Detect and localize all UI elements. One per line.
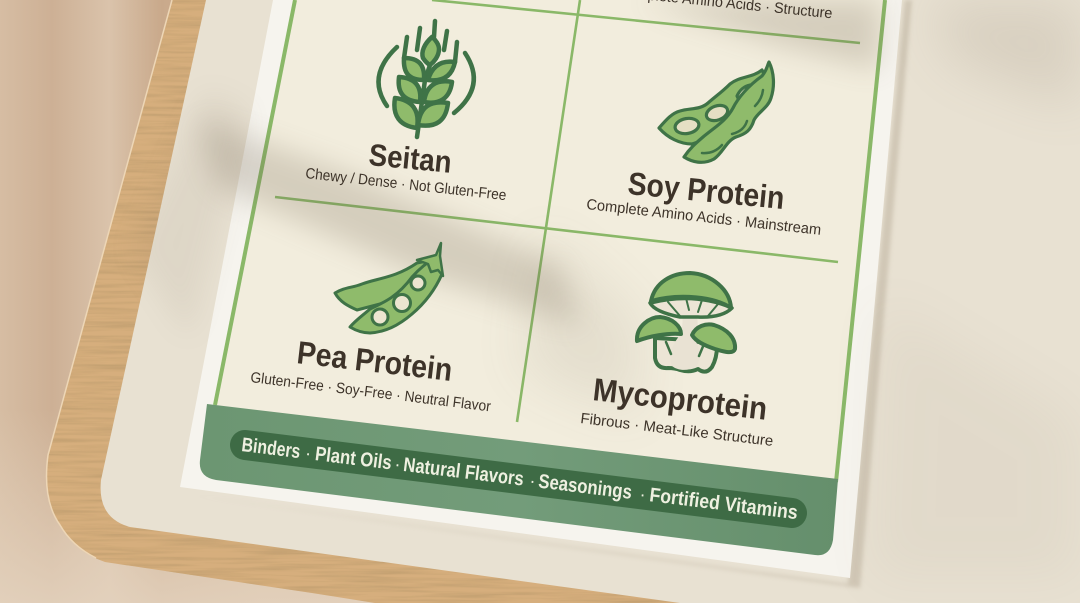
icon: wheat <box>379 21 474 137</box>
main stem <box>670 310 700 370</box>
back half <box>335 260 432 310</box>
footer pill text: · <box>528 470 537 491</box>
pod dashes <box>702 90 763 153</box>
footer pill: other ingredients <box>240 434 799 524</box>
heading: Pea Protein: Pea Protein <box>295 334 454 388</box>
right cap <box>692 324 735 352</box>
large cap dome <box>651 273 731 308</box>
footer pill text: · <box>639 484 647 505</box>
outer frame lines <box>215 0 885 482</box>
stems base outline <box>655 338 717 372</box>
calyx and stem <box>417 243 443 276</box>
white paper <box>180 0 902 578</box>
front half <box>350 260 442 333</box>
footer pill text: Seasonings <box>537 471 633 504</box>
subtitle: Soy Protein: Complete Amino Acids · Mainstream <box>586 196 822 239</box>
footer pill text: Plant Oils <box>314 443 393 474</box>
front pod <box>684 62 773 162</box>
wheat grains <box>394 37 455 128</box>
icon: mushrooms <box>637 273 735 372</box>
subtitle: Mycoprotein: Fibrous · Meat-Like Structure <box>580 410 774 450</box>
subtitle: Pea Protein: Gluten-Free · Soy-Free · Neutral Flavor <box>250 369 492 415</box>
soy beans <box>674 85 750 135</box>
subtitle: Seitan: Chewy / Dense · Not Gluten-Free <box>305 165 507 204</box>
footer pill text: · <box>393 454 402 474</box>
back pod <box>659 70 772 144</box>
heading: Soy Protein: Soy Protein <box>626 165 786 216</box>
large cap underside <box>650 299 732 317</box>
cream inner panel <box>215 0 885 482</box>
paper sheet <box>180 0 912 588</box>
wheat whiskers and arcs <box>379 21 474 137</box>
footer pill text: Natural Flavors <box>402 454 525 491</box>
grid lines <box>275 0 860 422</box>
green footer band <box>200 404 838 555</box>
wood edge highlight <box>46 0 172 558</box>
footer pill text: Binders <box>240 434 302 463</box>
left cap <box>637 317 681 341</box>
icon: soybean pod <box>659 62 773 162</box>
peas <box>372 276 425 325</box>
footer pill text: · <box>304 443 312 464</box>
heading: Mycoprotein: Mycoprotein <box>591 371 769 427</box>
heading: Seitan: Seitan <box>367 137 453 180</box>
footer pill text: Fortified Vitamins <box>648 484 799 524</box>
footer pill text <box>240 434 799 524</box>
icon: pea pod <box>335 243 443 333</box>
stem separators <box>666 342 704 356</box>
paper shadow <box>190 0 912 588</box>
gill lines <box>668 298 718 316</box>
table edge: wood <box>46 0 720 603</box>
